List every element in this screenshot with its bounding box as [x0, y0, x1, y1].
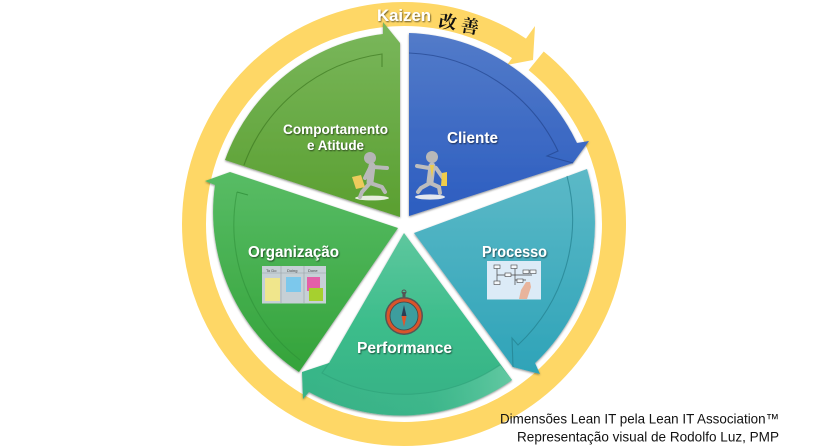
- caption: [500, 410, 779, 444]
- label: Cliente: Cliente: [447, 130, 498, 147]
- icon: kanban board: To Do: [266, 268, 277, 273]
- icon: compass: [385, 290, 423, 335]
- heading: Kaizen: [377, 6, 481, 40]
- panel: Organização: [205, 172, 398, 372]
- caption: Dimensões Lean IT pela Lean IT Association™: [500, 410, 779, 426]
- label: Organização: Organização: [248, 244, 339, 261]
- heading: Kaizen: 善: [459, 11, 481, 40]
- panel: Processo: [414, 169, 595, 374]
- heading: Kaizen: Kaizen: [377, 6, 431, 25]
- icon: running figure with document (green): [352, 152, 389, 200]
- panel: Comportamento e Atitude: [225, 22, 400, 217]
- icon: kanban board: [262, 266, 326, 304]
- Kaizen ring arrow: [194, 14, 614, 434]
- panel: Performance: [302, 233, 512, 416]
- label: Performance: Performance: [357, 340, 452, 357]
- label: Comportamento e Atitude: Comportamento: [283, 122, 388, 137]
- icon: kanban board: Done: [308, 268, 318, 273]
- icon: running figure with document (blue): [415, 151, 447, 200]
- icon: kanban board: Doing: [287, 268, 297, 273]
- heading: Kaizen: 改: [437, 7, 459, 35]
- label: Comportamento e Atitude: [283, 122, 388, 153]
- label: Processo: Processo: [482, 244, 547, 261]
- panel: Cliente: [409, 33, 589, 216]
- label: Comportamento e Atitude: e Atitude: [307, 138, 364, 153]
- caption: Representação visual de Rodolfo Luz, PMP: [517, 428, 779, 444]
- icon: process diagram with hand: [487, 261, 541, 300]
